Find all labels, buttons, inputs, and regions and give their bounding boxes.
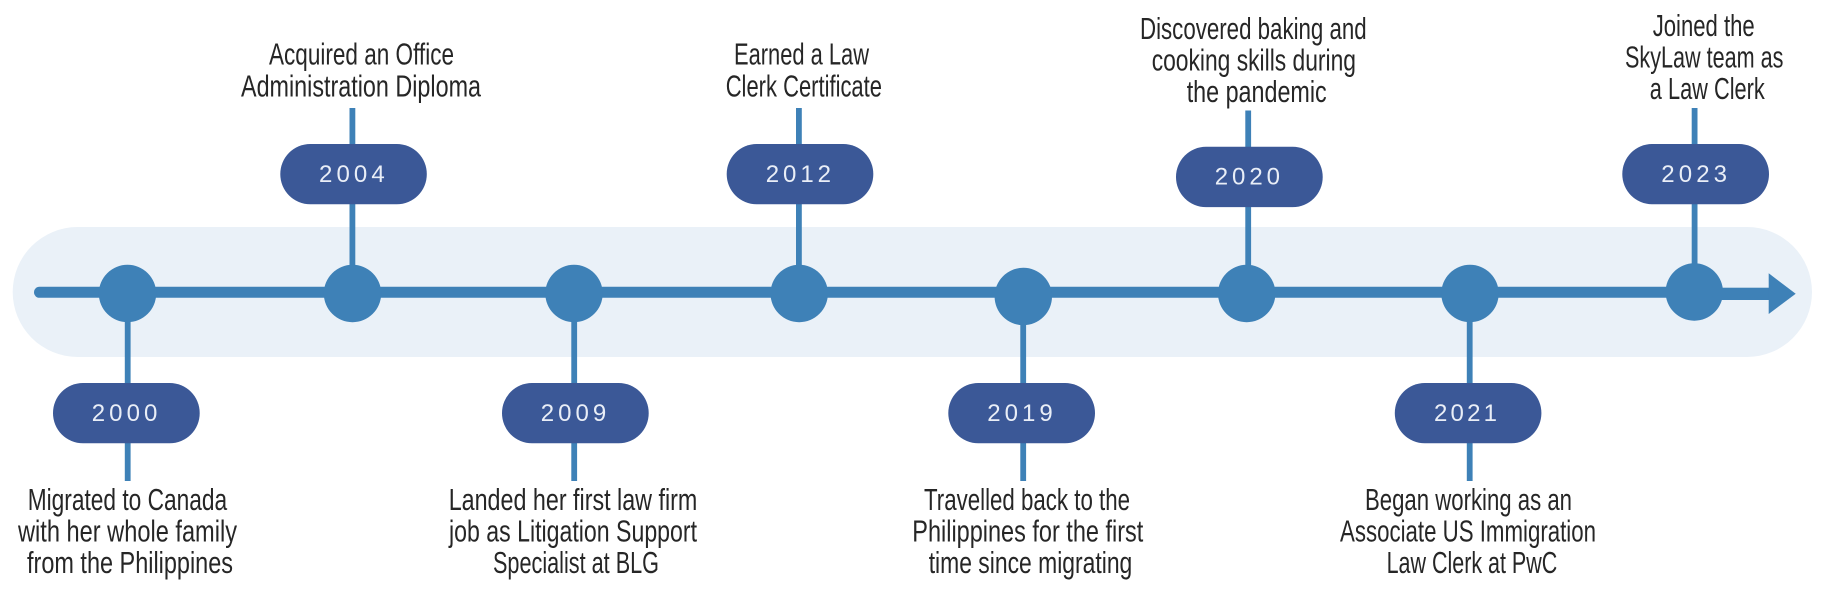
description 2004: Acquired an Office <box>269 38 454 72</box>
year pill 2012 <box>727 144 873 204</box>
node 2020 <box>1218 265 1275 322</box>
description 2000: from the Philippines <box>27 546 233 580</box>
year pill 2000: 2000 <box>92 400 157 427</box>
year pill 2009: 2009 <box>541 400 606 427</box>
milestone: 2021 <box>1340 265 1596 580</box>
description 2009: job as Litigation Support <box>448 515 697 549</box>
description 2000: with her whole family <box>17 515 238 549</box>
milestone: 2012 <box>726 38 882 322</box>
milestone: 2000 <box>17 265 238 580</box>
description 2009: Specialist at BLG <box>493 546 659 580</box>
description 2004 <box>241 38 481 103</box>
year pill 2004 <box>280 144 427 204</box>
year pill 2000 <box>53 383 200 443</box>
description 2021: Associate US Immigration <box>1340 515 1596 549</box>
description 2019 <box>912 483 1144 580</box>
node 2021 <box>1441 265 1499 322</box>
connector 2012 <box>796 108 802 293</box>
node 2019 <box>995 268 1052 325</box>
milestone: 2023 <box>1622 9 1783 321</box>
description 2012: Earned a Law <box>734 38 870 72</box>
description 2019: Philippines for the first <box>912 515 1144 549</box>
description 2020: the pandemic <box>1187 75 1327 109</box>
description 2009: Landed her first law firm <box>449 483 697 517</box>
year pill 2019 <box>948 383 1095 443</box>
milestone: 2019 <box>912 268 1144 580</box>
description 2020: Discovered baking and <box>1140 12 1367 46</box>
year pill 2023: 2023 <box>1661 161 1727 188</box>
milestone: 2020 <box>1140 12 1367 322</box>
node 2009 <box>545 265 603 322</box>
year pill 2023 <box>1622 144 1769 204</box>
description 2020 <box>1140 12 1367 109</box>
description 2019: time since migrating <box>929 546 1132 580</box>
node 2004 <box>324 265 381 322</box>
description 2021: Law Clerk at PwC <box>1387 546 1557 580</box>
node 2012 <box>770 265 828 322</box>
year pill 2009 <box>502 383 649 443</box>
arrow <box>1700 273 1796 314</box>
year pill 2012: 2012 <box>766 161 831 188</box>
connector 2000 <box>125 292 131 481</box>
description 2021 <box>1340 483 1596 580</box>
description 2023: a Law Clerk <box>1650 72 1765 106</box>
connector 2019 <box>1020 295 1026 481</box>
description 2020: cooking skills during <box>1152 43 1356 77</box>
connector 2004 <box>350 108 355 293</box>
description 2021: Began working as an <box>1365 483 1572 517</box>
description 2023: Joined the <box>1653 9 1755 43</box>
year pill 2021: 2021 <box>1434 400 1497 427</box>
year pill 2020: 2020 <box>1215 164 1280 191</box>
description 2009 <box>448 483 697 580</box>
background band <box>13 227 1812 357</box>
node 2023 <box>1666 263 1723 321</box>
description 2000 <box>17 483 238 580</box>
description 2000: Migrated to Canada <box>28 483 227 517</box>
description 2019: Travelled back to the <box>924 483 1130 517</box>
connector 2009 <box>571 292 577 481</box>
description 2012 <box>726 38 882 103</box>
connector 2020 <box>1245 110 1251 294</box>
connector 2021 <box>1467 292 1473 481</box>
description 2012: Clerk Certificate <box>726 69 882 103</box>
milestone: 2009 <box>448 265 697 580</box>
description 2023 <box>1625 9 1783 106</box>
year pill 2020 <box>1176 147 1323 207</box>
main timeline line <box>34 287 1674 298</box>
year pill 2019: 2019 <box>987 400 1053 427</box>
milestone: 2004 <box>241 38 481 322</box>
node 2000 <box>99 265 156 322</box>
description 2004: Administration Diploma <box>241 69 481 103</box>
year pill 2021 <box>1395 383 1541 443</box>
year pill 2004: 2004 <box>319 161 385 188</box>
connector 2023 <box>1692 108 1698 293</box>
